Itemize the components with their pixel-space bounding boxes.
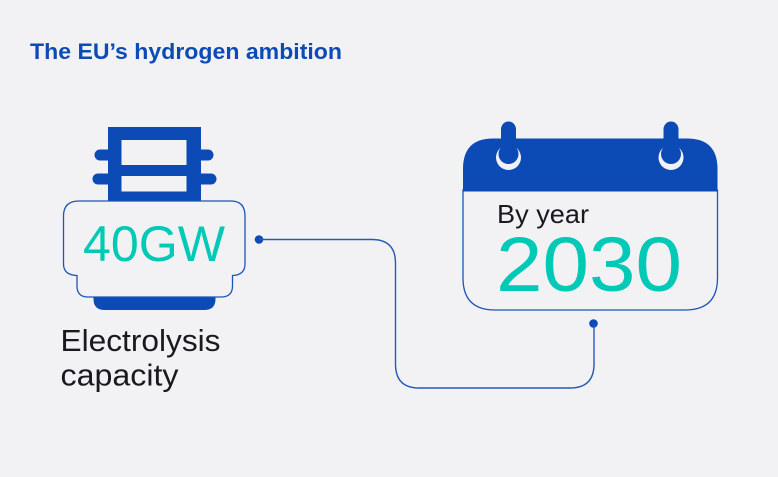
connector arrow	[255, 235, 598, 388]
by year label: By year	[497, 199, 589, 229]
electrolyser body with value	[64, 201, 245, 297]
icon: calendar	[463, 122, 718, 310]
calendar rings	[496, 122, 684, 170]
electrolyser body with value: 40GW	[83, 216, 226, 272]
year value: 2030	[496, 222, 682, 308]
calendar header	[463, 138, 718, 192]
title: The EU’s hydrogen ambition	[30, 39, 342, 64]
label: electrolysis capacity: Electrolysis	[60, 324, 220, 358]
label: electrolysis capacity: capacity	[60, 358, 179, 392]
calendar page	[463, 190, 718, 310]
electrolyser base	[94, 296, 216, 310]
electrolyser stack	[92, 127, 216, 203]
icon: electrolyser	[64, 127, 245, 310]
